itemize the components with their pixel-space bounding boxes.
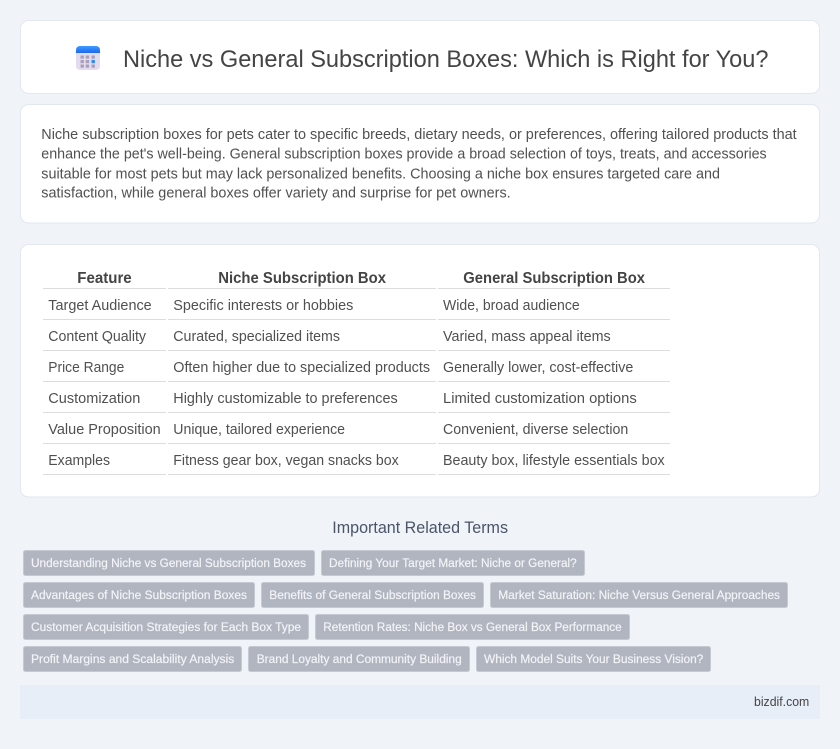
panel: header	[20, 20, 820, 94]
row: content quality: Content Quality	[48, 329, 147, 345]
text block: intro	[41, 127, 797, 202]
row: content quality: Varied, mass appeal items	[443, 329, 611, 345]
tag: Defining Your Target Market: Niche or General?	[329, 556, 577, 570]
tag: Benefits of General Subscription Boxes	[269, 588, 476, 602]
row: value proposition	[48, 422, 628, 438]
row: customization: Customization	[48, 391, 140, 407]
tag: Profit Margins and Scalability Analysis	[31, 652, 234, 666]
tag	[24, 582, 254, 608]
tags: related terms	[24, 550, 788, 672]
tag: Brand Loyalty and Community Building	[257, 652, 462, 666]
tag: Which Model Suits Your Business Vision?	[484, 652, 703, 666]
tag	[316, 614, 630, 640]
tag: Customer Acquisition Strategies for Each Box Type	[31, 620, 301, 634]
heading: related terms: Important Related Terms	[332, 519, 508, 537]
tag	[24, 550, 314, 576]
footer	[20, 685, 820, 719]
tag	[490, 582, 788, 608]
tag: Advantages of Niche Subscription Boxes	[31, 588, 247, 602]
row: target audience: Target Audience	[48, 298, 152, 314]
row: customization	[48, 391, 637, 407]
row: customization: Limited customization options	[443, 391, 637, 407]
row: target audience	[48, 298, 580, 314]
row: value proposition: Value Proposition	[48, 422, 161, 438]
tag	[476, 646, 710, 672]
row: content quality	[48, 329, 611, 345]
tag: Understanding Niche vs General Subscription Boxes	[31, 556, 306, 570]
row: target audience: Wide, broad audience	[443, 298, 580, 314]
row: examples	[48, 453, 665, 469]
row: target audience: Specific interests or hobbies	[173, 298, 353, 314]
text block: intro: enhance the pet's well-being. General subscription boxes provide a broad selection of toys, treats, and accessories	[41, 147, 767, 163]
text block: intro: Niche subscription boxes for pets cater to specific breeds, dietary needs, or preferences, offering tailored products that	[41, 127, 797, 143]
tag	[262, 582, 484, 608]
row: examples: Beauty box, lifestyle essentials box	[443, 453, 665, 469]
footer credit: bizdif.com	[754, 695, 809, 709]
row: price range: Often higher due to specialized products	[173, 360, 430, 376]
title: Niche vs General Subscription Boxes: Which is Right for You?	[123, 46, 768, 73]
row: value proposition: Unique, tailored experience	[173, 422, 345, 438]
text block: intro: suitable for most pets but may lack personalized benefits. Choosing a niche box ensures targeted care and	[41, 166, 720, 182]
tag: Market Saturation: Niche Versus General Approaches	[498, 588, 780, 602]
text block: intro: satisfaction, while general boxes offer variety and surprise for pet owners.	[41, 186, 511, 202]
tag	[322, 550, 584, 576]
tag	[24, 646, 242, 672]
icon: calendar	[76, 46, 100, 70]
row: price range: Price Range	[48, 360, 124, 376]
row: value proposition: Convenient, diverse selection	[443, 422, 628, 438]
table header: General Subscription Box	[463, 270, 645, 287]
table header	[77, 270, 645, 287]
tag	[24, 614, 308, 640]
tag	[248, 646, 470, 672]
table header: Niche Subscription Box	[218, 270, 386, 287]
row: examples: Fitness gear box, vegan snacks box	[173, 453, 399, 469]
table header: Feature	[77, 270, 132, 287]
tag: Retention Rates: Niche Box vs General Box Performance	[323, 620, 622, 634]
row: customization: Highly customizable to preferences	[173, 391, 398, 407]
panel: intro paragraph	[20, 104, 820, 223]
row: examples: Examples	[48, 453, 110, 469]
row: price range: Generally lower, cost-effective	[443, 360, 633, 376]
row: price range	[48, 360, 633, 376]
panel: comparison table	[20, 244, 820, 497]
row: content quality: Curated, specialized items	[173, 329, 340, 345]
